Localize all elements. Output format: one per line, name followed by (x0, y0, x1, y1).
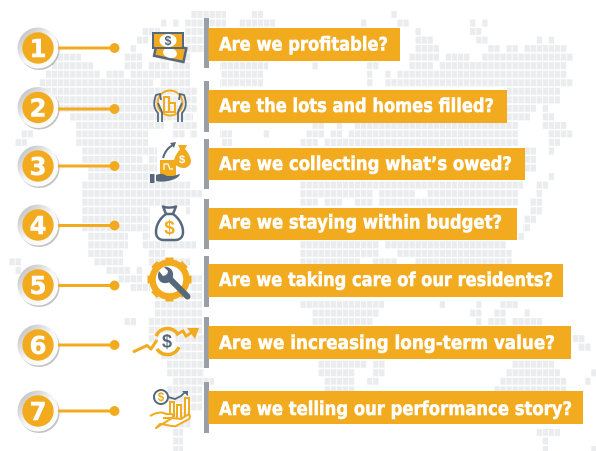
question 4 (208, 208, 517, 240)
icon: money bag (156, 206, 183, 240)
icon: banknotes: $ (165, 34, 172, 48)
row 4: budget (18, 199, 517, 249)
number badge 6 (18, 324, 60, 367)
number badge 7 (18, 390, 60, 433)
question 3 (208, 148, 525, 180)
number badge 3 (18, 146, 60, 188)
row 1: profitable (18, 18, 400, 70)
question 7 (208, 391, 583, 424)
number badge 2 (18, 87, 60, 130)
connector 3 (58, 161, 120, 171)
icon: money bag: $ (164, 218, 175, 239)
divider bar 3 (204, 139, 209, 189)
question 6 (208, 326, 571, 359)
icon: banknotes (153, 33, 186, 62)
question 2 (208, 90, 507, 123)
connector 7 (58, 406, 120, 416)
icon: coin with rising arrow (133, 328, 199, 355)
row 7: performance story (18, 382, 583, 433)
question 2: Are the lots and homes filled? (219, 96, 494, 117)
number badge 4: 4 (29, 211, 47, 240)
row 3: collections (18, 139, 525, 189)
question 5: Are we taking care of our residents? (219, 270, 553, 291)
question 5 (208, 264, 563, 297)
row 5: residents (18, 256, 563, 307)
icon: hand with bill and money bag: $ (179, 154, 185, 166)
number badge 1 (18, 28, 60, 70)
question 1 (208, 28, 400, 61)
divider bar 4 (204, 199, 209, 249)
divider bar 7 (204, 382, 209, 433)
number badge 5: 5 (29, 271, 47, 300)
question 6: Are we increasing long-term value? (219, 333, 555, 354)
number badge 6: 6 (29, 331, 47, 360)
connector 2 (58, 104, 120, 114)
icon: hand with bill and money bag (150, 142, 191, 183)
question 1: Are we profitable? (219, 34, 388, 56)
connector 4 (58, 220, 120, 230)
row 2: occupancy (18, 81, 507, 132)
icon: hands around coin (154, 90, 186, 122)
connector 5 (58, 280, 120, 290)
icon: hand with growth chart (150, 390, 190, 428)
connector 6 (58, 340, 120, 350)
row 6: long-term value (18, 317, 571, 368)
number badge 5 (18, 264, 60, 307)
number badge 3: 3 (29, 152, 47, 181)
icon: gear and wrench (148, 258, 192, 302)
divider bar 1 (204, 18, 209, 68)
number badge 2: 2 (29, 93, 47, 122)
divider bar 6 (204, 317, 209, 368)
number badge 1: 1 (29, 34, 47, 63)
question 4: Are we staying within budget? (219, 212, 502, 234)
icon: coin with rising arrow: $ (162, 332, 172, 352)
icon: hand with growth chart: $ (158, 392, 165, 404)
question 3: Are we collecting what’s owed? (219, 154, 512, 175)
number badge 4 (18, 204, 60, 247)
divider bar 2 (204, 81, 209, 132)
connector 1 (58, 43, 120, 53)
divider bar 5 (204, 256, 209, 307)
number badge 7: 7 (29, 397, 47, 426)
